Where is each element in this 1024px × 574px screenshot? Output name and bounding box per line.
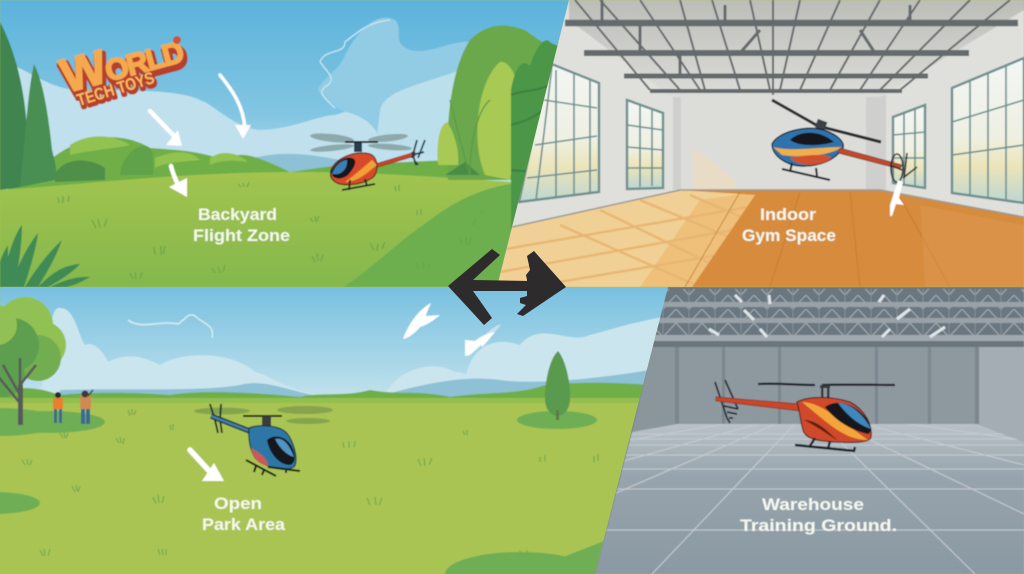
logo: world tech toys: WORLD: [57, 24, 190, 108]
park grass tufts: [22, 409, 598, 556]
helicopter: red backyard: [310, 132, 425, 190]
park hills: [60, 370, 650, 400]
label: indoor gym space: [742, 205, 836, 245]
label: indoor gym space: Indoor: [760, 205, 816, 224]
panel: indoor gym space: [490, 0, 1024, 290]
backyard grass tufts: [57, 182, 422, 280]
label: indoor gym space: Gym Space: [742, 226, 836, 245]
backyard cloud outline: [320, 20, 390, 108]
backyard left conifers: [0, 22, 56, 190]
label: backyard flight zone: [193, 205, 290, 245]
label: open park area: Park Area: [202, 515, 286, 534]
label: warehouse training ground: Training Ground.: [740, 516, 897, 535]
park sky: [0, 287, 668, 399]
double-headed arrow: [448, 249, 566, 325]
label: backyard flight zone: Backyard: [198, 205, 277, 224]
white arrow park: [190, 450, 224, 481]
label: open park area: [202, 496, 286, 531]
tree left: [0, 297, 105, 436]
gym left windows: [519, 63, 663, 202]
gym trusses: [565, 0, 1018, 95]
warehouse roof trusses: [650, 287, 1024, 347]
backyard far hills: [256, 154, 338, 172]
logo: world tech toys: WORLD: [55, 20, 188, 104]
backyard hedges: [8, 136, 449, 190]
logo: world tech toys: TECH TOYS: [75, 68, 157, 110]
backyard right trees: [437, 25, 558, 232]
park squiggle cloud: [128, 315, 213, 338]
gym floor: [497, 190, 1024, 287]
helicopter: red warehouse: [715, 380, 895, 451]
gym right windows: [893, 58, 1024, 203]
helicopter: colorful gym: [772, 100, 917, 182]
helicopter: blue: [194, 404, 333, 476]
logo: world tech toys: TECH TOYS: [76, 70, 158, 112]
gym baseboards: [512, 190, 1024, 227]
label: open park area: Open: [214, 494, 262, 513]
label: backyard flight zone: Flight Zone: [193, 226, 290, 245]
ground patches: [0, 492, 40, 514]
warehouse lights: [709, 295, 945, 337]
backyard lawn: [0, 172, 570, 287]
backyard clouds: [16, 17, 469, 163]
gym sun patches on wall: [693, 147, 735, 190]
backyard right slope: [345, 184, 512, 287]
label: warehouse training ground: [740, 495, 897, 535]
white arrows backyard: [150, 75, 251, 197]
panel: warehouse training ground: [590, 287, 1024, 574]
gym ceiling: [569, 0, 1024, 97]
warehouse floor: [590, 410, 1024, 574]
panel: open park area: [0, 287, 670, 574]
gym sunlit floor: [490, 185, 770, 290]
backyard fern: [0, 225, 90, 287]
white birds: [403, 303, 501, 356]
people: [53, 390, 93, 424]
white arrow gym: [890, 180, 904, 216]
gym back wall: [680, 92, 866, 192]
park clouds: [40, 308, 670, 395]
label: warehouse training ground: Warehouse: [762, 495, 864, 514]
warehouse walls: [632, 347, 675, 432]
panel: backyard flight zone: [0, 0, 575, 287]
poplar tree: [517, 411, 597, 429]
